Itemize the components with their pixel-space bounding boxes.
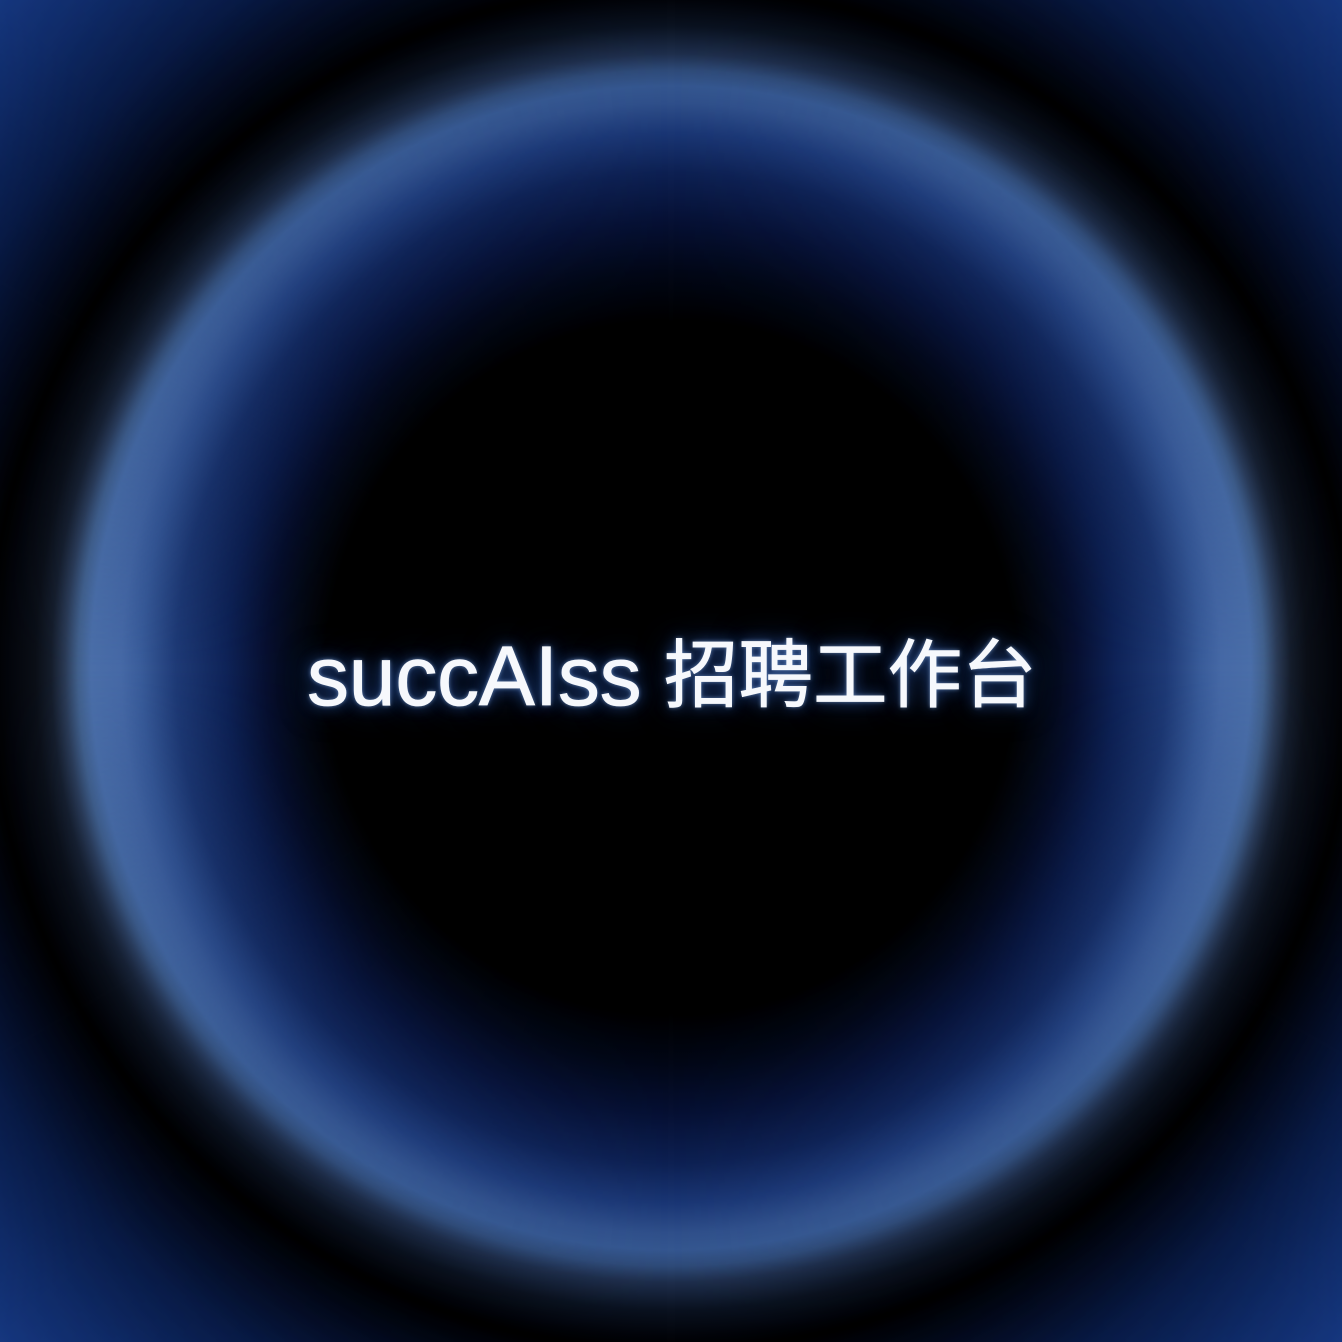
title: succAIss: [307, 629, 641, 723]
background: brighter ring sides: [16, 236, 1326, 1100]
title: [299, 625, 1041, 723]
title: 招聘工作台: [664, 634, 1037, 717]
